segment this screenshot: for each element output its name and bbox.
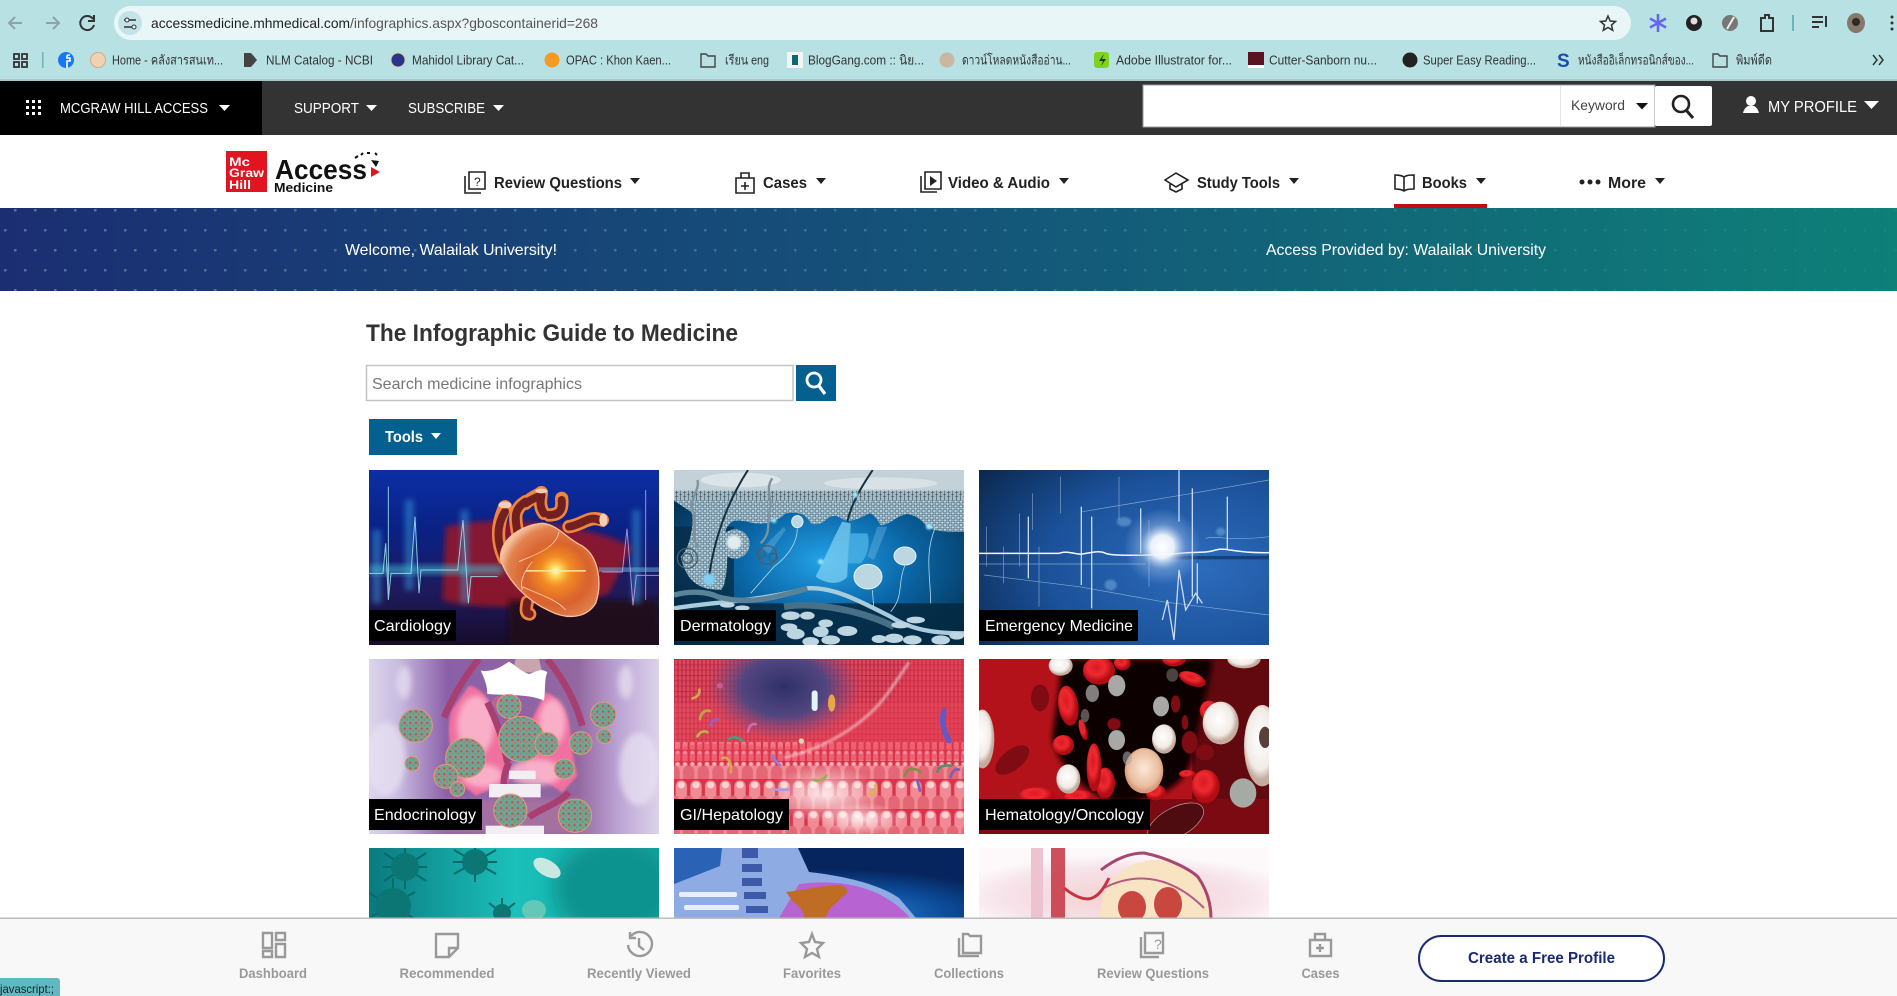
menu: cases [736, 173, 826, 193]
access medicine logo: Hill [229, 178, 251, 192]
create a free profile button: Create a Free Profile [1468, 950, 1615, 967]
tile: dermatology [674, 470, 964, 645]
item: collections [934, 934, 1004, 981]
my profile [1743, 96, 1879, 116]
my profile: MY PROFILE [1768, 99, 1857, 116]
tile: musculoskeletal partial [674, 848, 964, 918]
tile: infectious disease partial [369, 848, 659, 918]
item: recently viewed [587, 932, 691, 981]
item: recently viewed: Recently Viewed [587, 965, 691, 981]
menu: more [1580, 175, 1665, 192]
tools button: Tools [385, 429, 423, 446]
item: collections: Collections [934, 965, 1004, 981]
access medicine logo: Medicine [274, 180, 333, 195]
bookmarks bar: BlogGang.com :: นิย... [808, 52, 924, 68]
browser toolbar [0, 0, 1897, 81]
site info icon [118, 11, 142, 35]
bookmarks bar: NLM Catalog - NCBI [266, 52, 373, 68]
tile: cardiology [369, 470, 659, 645]
back and forward arrows [9, 17, 59, 29]
access medicine logo: Access [275, 154, 367, 185]
site header [0, 135, 1897, 208]
label: emergency medicine [979, 610, 1138, 641]
mcgraw hill access menu [0, 81, 262, 135]
menu: review questions: ? [474, 175, 481, 189]
bookmarks bar: พิมพ์ดีด [1736, 52, 1772, 68]
bookmarks bar: S [1557, 51, 1570, 72]
label: dermatology: Dermatology [680, 618, 771, 635]
mcgraw hill access menu: MCGRAW HILL ACCESS [60, 100, 208, 117]
bookmarks bar: OPAC : Khon Kaen... [566, 52, 671, 68]
item: favorites [783, 934, 841, 981]
reload icon [80, 15, 94, 30]
bookmarks bar: Home - คลังสารสนเท... [112, 52, 223, 68]
item: cases [1302, 934, 1340, 981]
label: hematology oncology [979, 799, 1150, 830]
item: dashboard [239, 933, 307, 981]
item: recommended: Recommended [400, 965, 494, 981]
bookmark star [1600, 16, 1616, 30]
item: recommended [400, 934, 494, 981]
top navigation bar [0, 81, 1897, 135]
tile: obstetrics partial [979, 848, 1269, 918]
tile: hematology oncology [979, 659, 1269, 834]
subscribe menu: SUBSCRIBE [408, 100, 485, 117]
item: review questions [1097, 933, 1209, 981]
extension icons [1650, 13, 1894, 33]
apps icon [14, 54, 27, 67]
facebook icon [58, 52, 74, 68]
bottom toolbar [0, 918, 1897, 996]
site search [1143, 85, 1712, 127]
label: hematology oncology: Hematology/Oncology [985, 807, 1144, 824]
heart [498, 489, 607, 616]
bookmarks bar: Super Easy Reading... [1423, 52, 1536, 68]
bookmarks bar: ดาวน์โหลดหนังสืออ่าน... [962, 52, 1071, 68]
bookmarks bar [14, 50, 1883, 72]
label: emergency medicine: Emergency Medicine [985, 618, 1133, 635]
status tooltip: javascript:; [0, 982, 54, 996]
tile: emergency medicine [979, 470, 1269, 645]
welcome banner [0, 208, 1897, 291]
create a free profile button [1419, 936, 1664, 981]
bookmarks bar: Adobe Illustrator for... [1116, 52, 1232, 68]
menu: study tools: Study Tools [1197, 175, 1280, 192]
item: cases: Cases [1302, 965, 1340, 981]
bookmarks bar: Cutter-Sanborn nu... [1269, 52, 1377, 68]
label: endocrinology: Endocrinology [374, 807, 476, 824]
welcome text: Welcome, Walailak University! [345, 242, 557, 259]
bookmarks bar: หนังสืออิเล็กทรอนิกส์ของ... [1578, 50, 1694, 68]
tile: endocrinology [369, 659, 659, 834]
page title: The Infographic Guide to Medicine [366, 320, 738, 347]
label: gi hepatology: GI/Hepatology [680, 807, 783, 824]
menu: video and audio: Video & Audio [948, 175, 1050, 192]
item: review questions: ? [1154, 936, 1162, 952]
address bar [114, 6, 1631, 40]
site search: Keyword [1571, 97, 1625, 113]
item: favorites: Favorites [783, 965, 841, 981]
label: cardiology [369, 610, 456, 641]
label: gi hepatology [674, 799, 789, 830]
menu: books active [1394, 175, 1487, 208]
access provided text: Access Provided by: Walailak University [1266, 242, 1546, 259]
label: cardiology: Cardiology [374, 618, 451, 635]
bookmarks bar: Mahidol Library Cat... [412, 52, 524, 68]
bookmarks bar: เรียน eng [725, 52, 769, 68]
menu: books active: Books [1422, 175, 1467, 192]
item: review questions: Review Questions [1097, 965, 1209, 981]
access medicine logo: Graw [229, 166, 265, 180]
infographics search field: Search medicine infographics [372, 376, 582, 393]
menu: more: More [1608, 175, 1646, 192]
access medicine logo: Mc [229, 155, 250, 169]
search button [796, 365, 836, 401]
label: endocrinology [369, 799, 482, 830]
menu: cases: Cases [763, 175, 807, 192]
menu: review questions [465, 172, 640, 193]
item: dashboard: Dashboard [239, 965, 307, 981]
support menu: SUPPORT [294, 100, 359, 117]
infographics search field [366, 366, 793, 400]
tile: gi hepatology [674, 659, 964, 834]
menu: review questions: Review Questions [494, 175, 622, 192]
tools button [369, 419, 457, 455]
menu: video and audio [921, 172, 1069, 192]
page url: accessmedicine.mhmedical.com/infographics.aspx?gboscontainerid=268 [151, 15, 598, 31]
label: dermatology [674, 610, 776, 641]
menu: study tools [1165, 173, 1299, 192]
access medicine logo [226, 151, 380, 195]
